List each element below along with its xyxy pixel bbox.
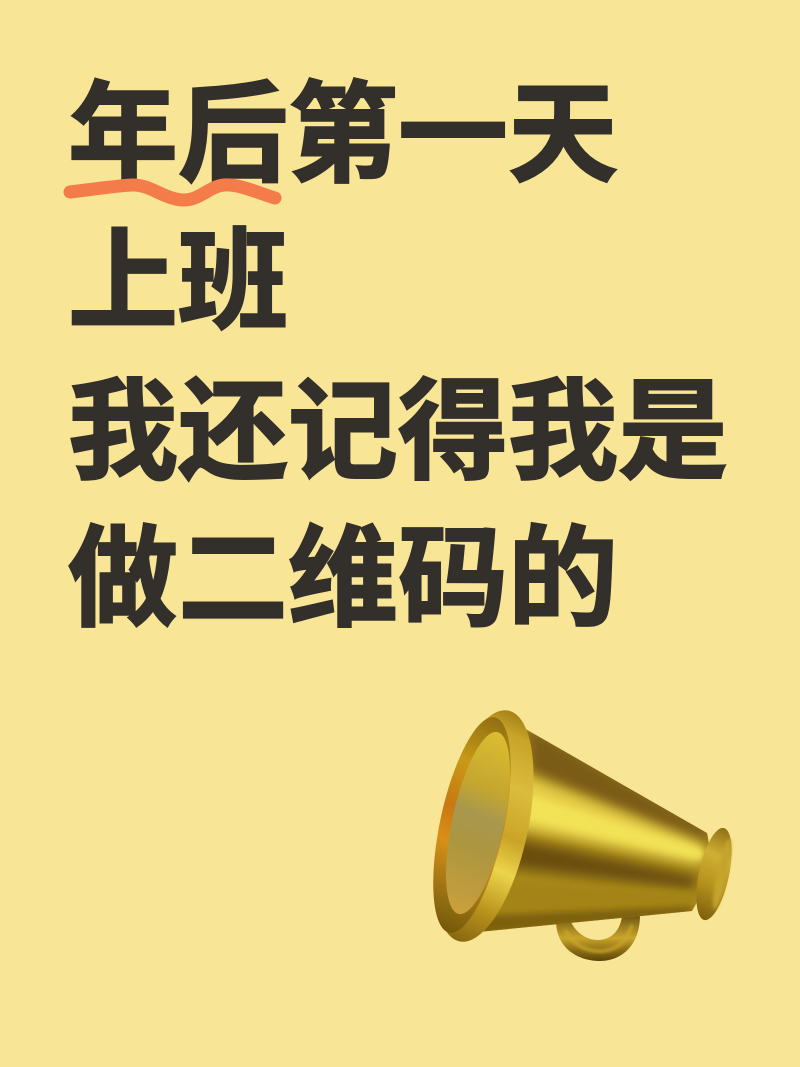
megaphone handle [556, 915, 640, 961]
title line 4: 做二维码的 [68, 518, 618, 641]
megaphone front rim and opening [416, 701, 552, 951]
title line 2: 上班 [68, 221, 288, 344]
megaphone cone [483, 729, 709, 932]
orange wavy underline [64, 178, 282, 206]
title line 1: 年后第一天 [68, 74, 618, 197]
icon: golden megaphone [433, 710, 734, 961]
megaphone small end rim [690, 825, 738, 923]
title line 3: 我还记得我是 [68, 371, 728, 494]
